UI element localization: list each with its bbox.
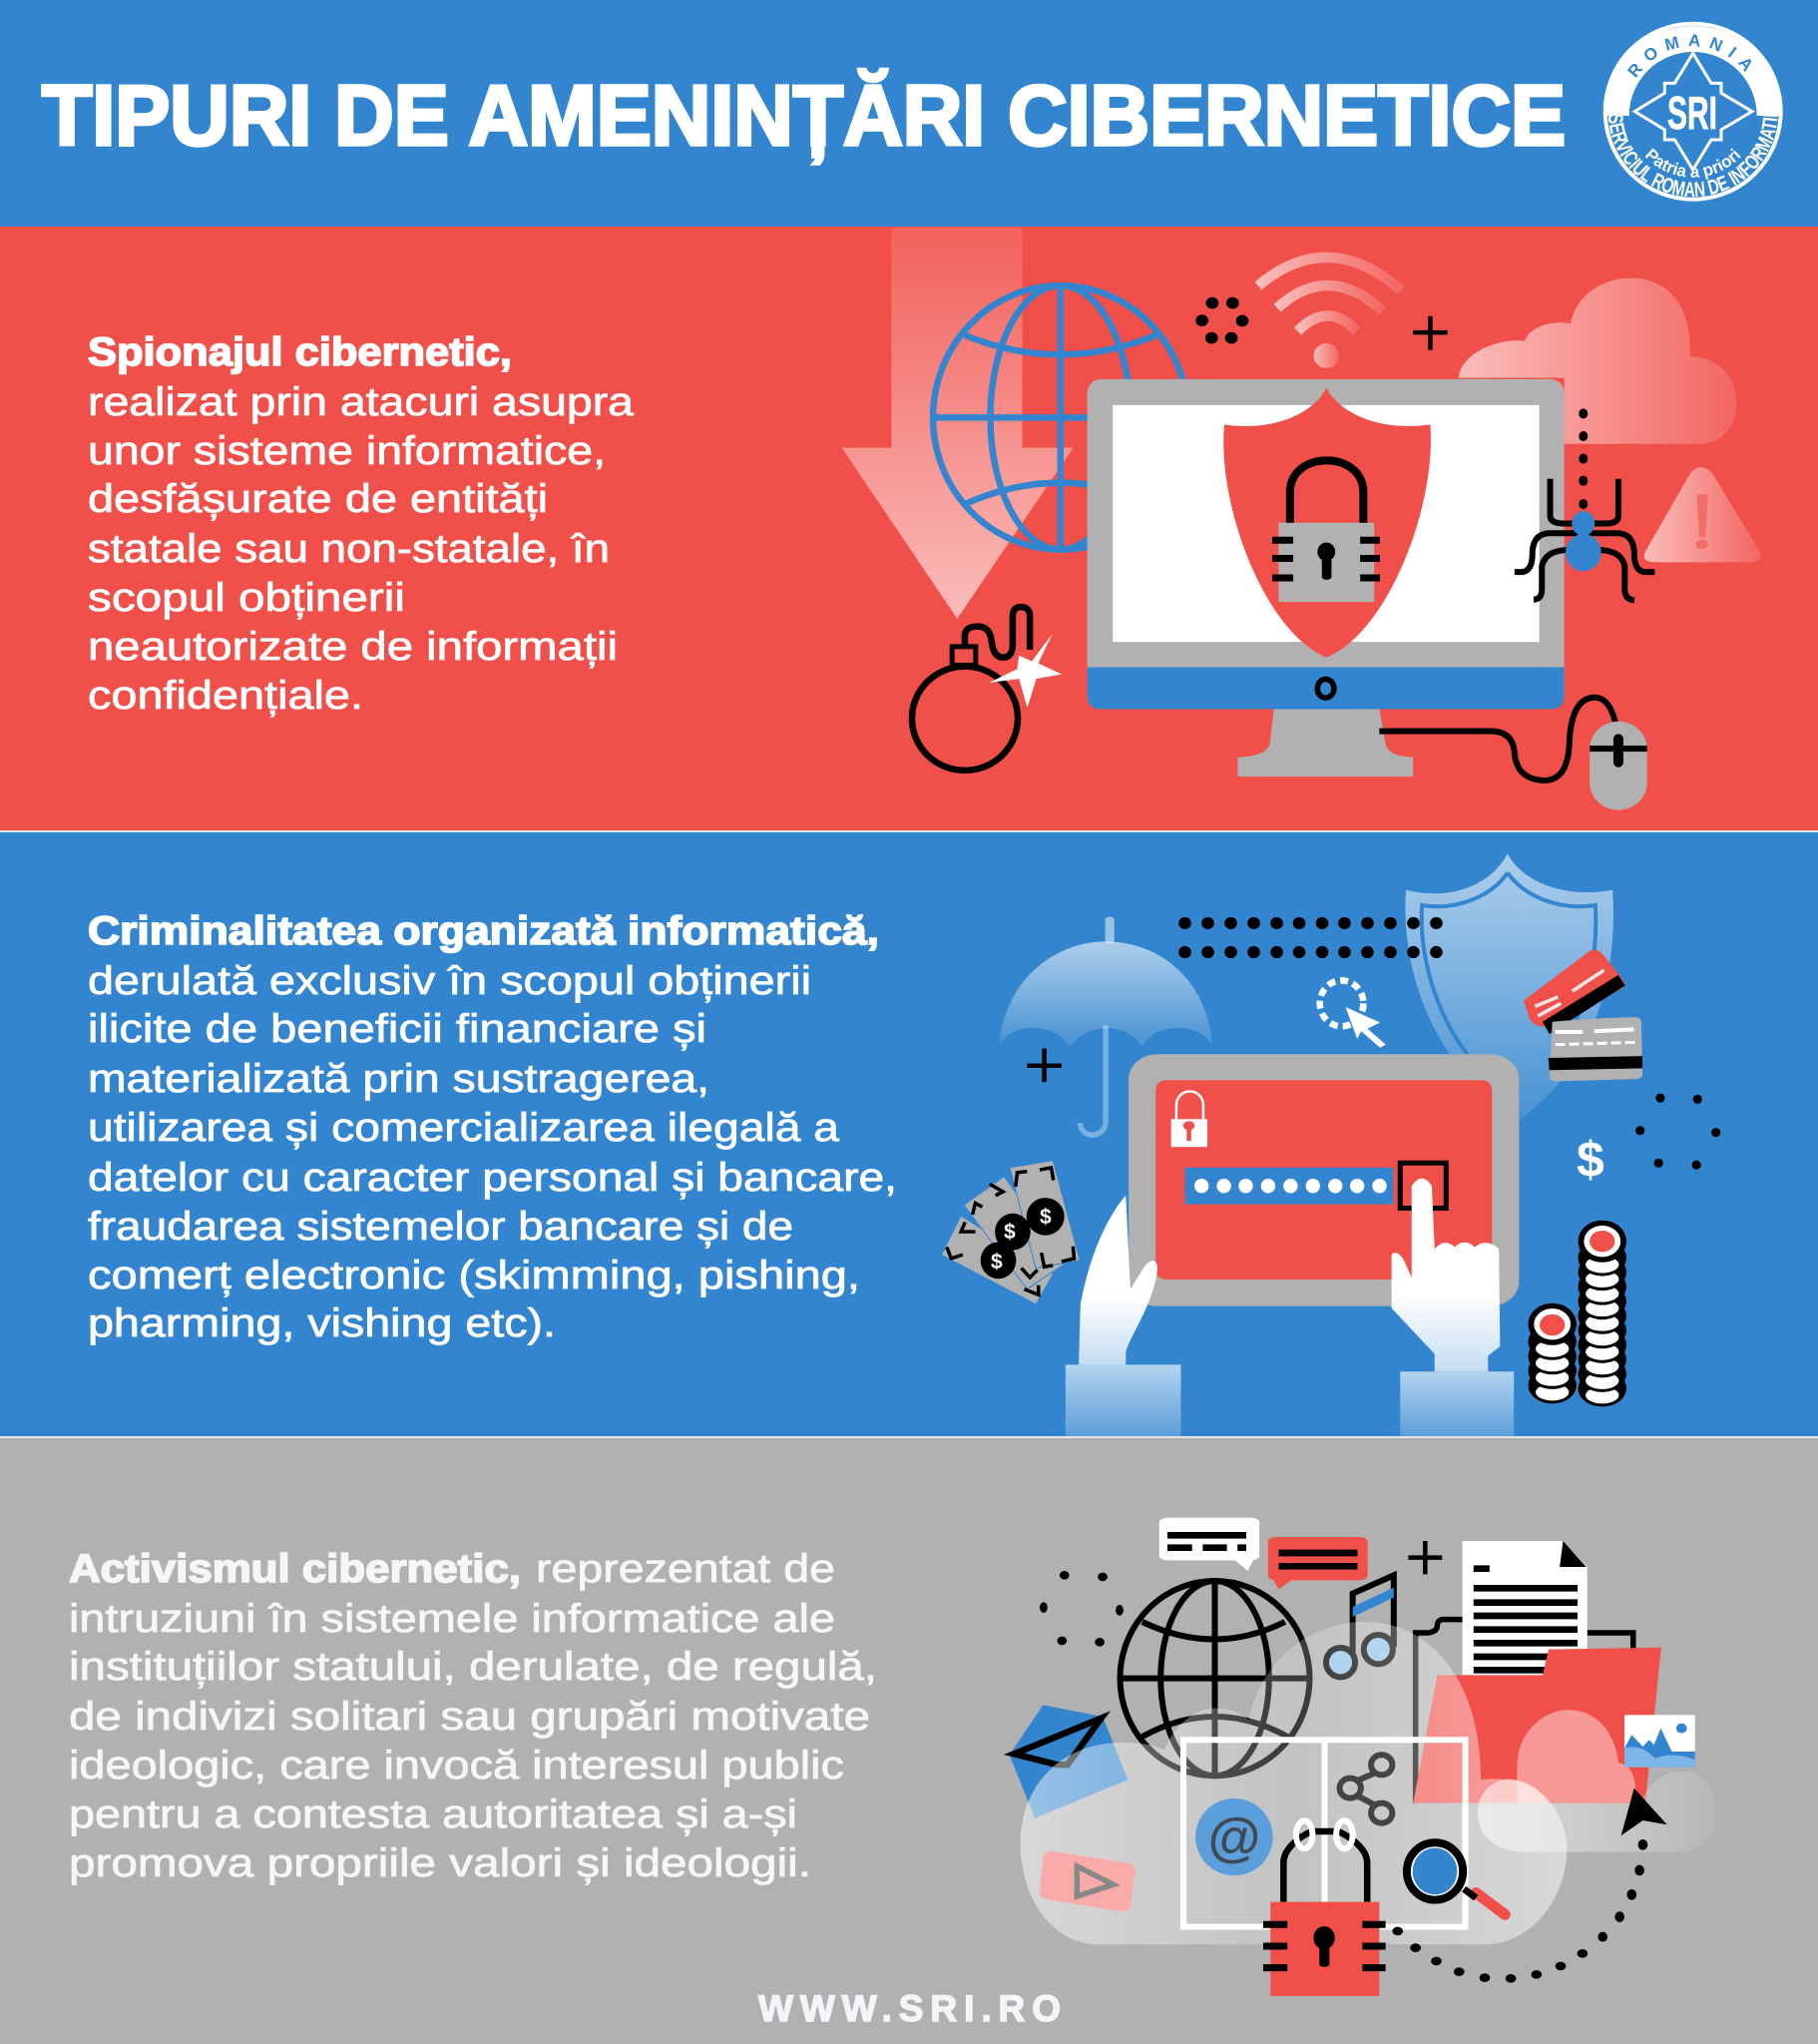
icon: light shield [1405, 853, 1613, 1121]
icon: money notes [942, 1161, 1080, 1303]
icon: download arrow [842, 228, 1074, 619]
icon: folder cloud [1517, 1710, 1636, 1803]
icon: plus [1027, 1048, 1062, 1082]
icon: bank cards [1524, 950, 1642, 1081]
text block: criminalitatea organizata [88, 909, 897, 1345]
text block: activismul cibernetic: promova propriile valori și ideologii. [69, 1841, 811, 1885]
title: TIPURI DE AMENINȚĂRI CIBERNETICE [42, 69, 1566, 164]
password field [1185, 1168, 1393, 1205]
dotted rows [1178, 917, 1443, 958]
icon: video tile [1040, 1851, 1136, 1911]
dotted path [1392, 1839, 1647, 1983]
text block: spionajul cibernetic: realizat prin atacuri asupra [88, 380, 635, 424]
text block: activismul cibernetic: Activismul cibernetic, [69, 1547, 521, 1591]
icon: bomb [912, 607, 1062, 770]
icon: dot ring [1635, 1094, 1720, 1170]
icon: arrow cursor [1621, 1788, 1667, 1835]
icon: right hand [1392, 1179, 1514, 1436]
text block: spionajul cibernetic: statale sau non-statale, în [88, 527, 610, 571]
footer url: WWW.SRI.RO [758, 1988, 1061, 2029]
text block: criminalitatea organizata: datelor cu caracter personal și bancare, [88, 1156, 897, 1200]
icon: tablet [1129, 1054, 1519, 1306]
icon: spider [1515, 408, 1654, 601]
icon: at sign: @ [1208, 1807, 1260, 1867]
illustration: online banking fraud [942, 853, 1720, 1436]
illustration: computer under attack [842, 228, 1761, 810]
icon: wifi [1258, 257, 1402, 331]
text block: spionajul cibernetic: scopul obținerii [88, 576, 405, 620]
icon: plus [1408, 1541, 1442, 1574]
text block: criminalitatea organizata: fraudarea sistemelor bancare și de [88, 1205, 793, 1249]
logo: SRI emblem: ROMANIA [1626, 34, 1752, 78]
text block: criminalitatea organizata: utilizarea și comercializarea ilegală a [88, 1106, 840, 1150]
icon: music note [1326, 1575, 1394, 1677]
icon: cursor [1320, 980, 1386, 1048]
text block: spionajul cibernetic: Spionajul cibernetic, [88, 330, 512, 374]
icon: padlock [1263, 1820, 1386, 1996]
icon: small cloud [1478, 1771, 1715, 1852]
dollar signs on notes [991, 1206, 1052, 1274]
text block: criminalitatea organizata: materializată prin sustragerea, [88, 1057, 709, 1101]
icon: dot ring [1040, 1571, 1124, 1647]
text block: activismul cibernetic: ideologic, care invocă interesul public [69, 1744, 844, 1788]
text block: criminalitatea organizata: comerț electronic (skimming, pishing, [88, 1254, 860, 1297]
icon: plus [1413, 316, 1448, 350]
icon: small padlock [1171, 1092, 1207, 1147]
text block: criminalitatea organizata: Criminalitatea organizată informatică, [88, 909, 879, 953]
logo: SRI emblem [1602, 22, 1783, 202]
icon: document [1463, 1541, 1588, 1677]
text block: spionajul cibernetic: unor sisteme informatice, [88, 429, 606, 473]
icon: mouse and cable [1379, 698, 1647, 810]
text block: spionajul cibernetic: confidențiale. [88, 674, 363, 718]
text block: activismul cibernetic: de indivizi solitari sau grupări motivate [69, 1695, 870, 1739]
icon: monitor [1088, 379, 1565, 776]
logo: SRI emblem: Patria a priori [1644, 148, 1741, 180]
icon: short coin stack [1529, 1303, 1577, 1403]
dollar signs on notes: $ [991, 1251, 1003, 1274]
icon: window frame [1183, 1740, 1466, 1927]
icon: paper plane card [1010, 1705, 1128, 1818]
icon: globe [932, 285, 1188, 550]
icon: red speech bubble [1268, 1537, 1368, 1590]
icon: cloud [1459, 278, 1736, 444]
panel: header [0, 0, 1818, 227]
text block: activismul cibernetic: intruziuni în sistemele informatice ale [69, 1597, 835, 1641]
text block: criminalitatea organizata: ilicite de beneficii financiare și [88, 1007, 706, 1051]
icon: picture [1624, 1715, 1695, 1768]
icon: white speech bubble [1159, 1518, 1259, 1571]
panel: spionaj cibernetic [0, 227, 1818, 832]
connector lines [1416, 1620, 1633, 1803]
illustration: cloud of online services [1010, 1518, 1715, 1996]
text block: criminalitatea organizata: derulată exclusiv în scopul obținerii [88, 959, 811, 1003]
logo: SRI emblem: SRI [1667, 87, 1717, 139]
text block: spionajul cibernetic [88, 330, 635, 718]
icon: dot ring [1195, 297, 1248, 343]
text block: activismul cibernetic [69, 1547, 877, 1885]
icon: tall coin stack [1579, 1221, 1626, 1406]
text block: activismul cibernetic: pentru a contesta autoritatea și a-și [69, 1792, 797, 1836]
icon: warning triangle [1644, 467, 1761, 562]
dollar signs on notes: $ [1004, 1221, 1016, 1244]
text block: activismul cibernetic: instituțiilor statului, derulate, de regulă, [69, 1645, 877, 1689]
text block: spionajul cibernetic: neautorizate de informații [88, 625, 618, 669]
icon: black globe [1121, 1581, 1310, 1776]
text block: criminalitatea organizata: pharming, vishing etc). [88, 1301, 556, 1345]
icon: shield with padlock [1223, 387, 1431, 658]
panel: activism cibernetic [0, 1438, 1818, 2044]
icon: dollar sign: $ [1577, 1132, 1604, 1188]
icon: folder [1413, 1648, 1661, 1803]
text block: spionajul cibernetic: desfășurate de entități [88, 477, 548, 521]
icon: left hand [1066, 1196, 1180, 1436]
panel: criminalitate informatica [0, 832, 1818, 1438]
logo: SRI emblem: SERVICIUL ROMAN DE INFORMATII [1608, 116, 1778, 198]
icon: at sign circle [1195, 1798, 1273, 1875]
icon: large cloud [1021, 1622, 1567, 1944]
icon: share [1340, 1755, 1392, 1823]
icon: magnifier [1407, 1842, 1505, 1914]
icon: umbrella [1000, 916, 1212, 1135]
text block: activismul cibernetic: reprezentat de [536, 1547, 835, 1591]
dollar signs on notes: $ [1040, 1206, 1052, 1229]
